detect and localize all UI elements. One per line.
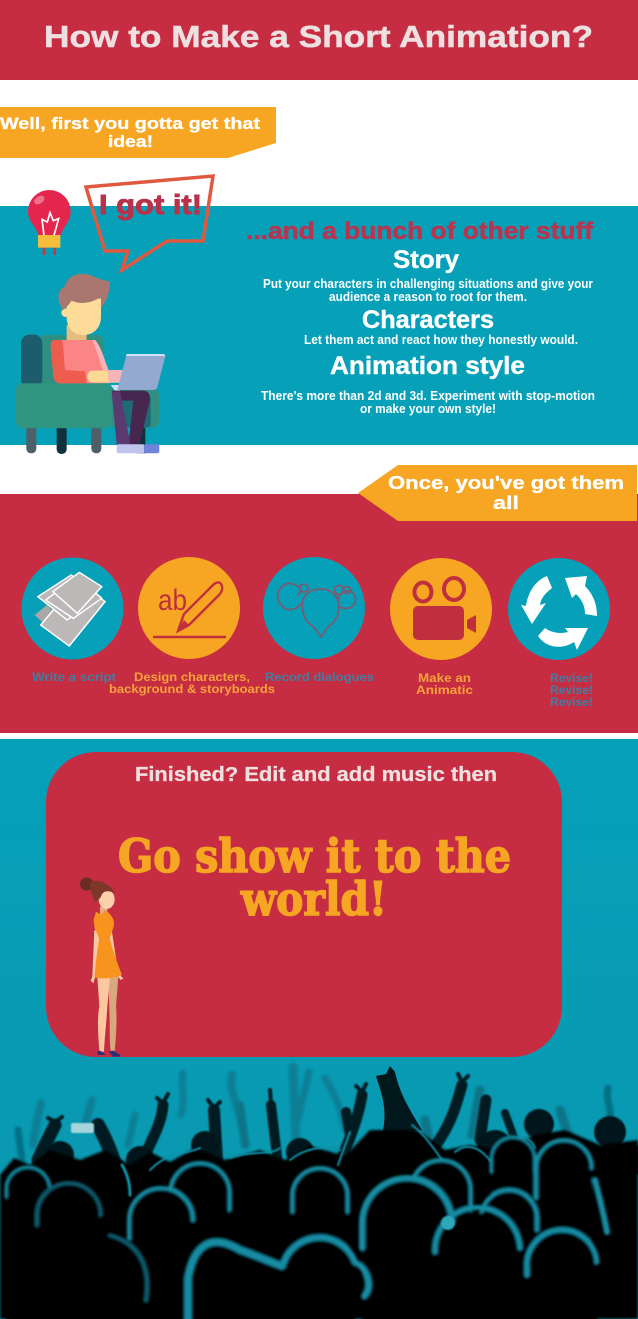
step labels: Animatic [416,683,473,697]
icon: light bulb [28,190,71,255]
text block: story [263,246,593,304]
text block: animation style: There's more than 2d and 3d. Experiment with stop-motion [261,389,595,403]
speech bubble: I got it! [86,176,213,270]
title banner [0,0,638,80]
central raised hand [376,1066,422,1135]
panel: red steps section [0,494,638,733]
text block: characters [304,306,578,347]
title: How to Make a Short Animation? [44,19,593,54]
text block: story: Story [393,246,459,274]
idea ribbon [0,107,276,158]
image: concert crowd silhouette [0,1066,638,1319]
illustration: person on armchair with laptop [16,274,165,454]
bright light spot [441,1216,455,1230]
icon: script pages [22,558,124,660]
back heads [46,1109,638,1176]
icon: dialogue bubbles [263,557,365,659]
text block: characters: Characters [362,306,494,334]
icon: film camera [390,558,492,660]
headline: go show it to the world [118,829,511,926]
faint rim lights [122,1125,535,1195]
step labels: Revise! [550,671,593,685]
step labels: background & storyboards [109,682,275,696]
panel: red rounded card [46,752,562,1057]
dark crowd mass [0,1130,638,1319]
distant raised arms [18,1067,610,1160]
headline: go show it to the world: Go show it to the [118,829,511,883]
speech bubble: I got it!: I got it! [99,189,202,220]
step labels: Record dialogues [265,670,374,684]
foreground heads with rim light [6,1137,607,1319]
step labels: Revise! [550,683,593,697]
icon: drawing ab and pencil [138,557,240,659]
dark raised arms [38,1074,515,1200]
panel: teal idea section [0,206,638,445]
icon: revise arrows [508,558,610,660]
step labels: Write a script [32,670,116,684]
ribbon: once you've got them all [358,465,637,521]
text block: story: Put your characters in challenging situations and give your [263,277,593,291]
panel: final teal section [0,739,638,1319]
text block: story: audience a reason to root for them. [329,290,527,304]
step labels: Make an [418,671,471,685]
text block: characters: Let them act and react how they honestly would. [304,333,578,347]
heading: and a bunch of other stuff: ...and a bunch of other stuff [246,218,594,245]
ribbon: once you've got them all: all [493,492,519,513]
idea ribbon: idea! [108,133,153,151]
text: finished: Finished? Edit and add music then [135,764,497,786]
step labels [32,670,593,709]
phone [71,1123,94,1133]
text block: animation style [261,352,595,416]
step labels: Revise! [550,695,593,709]
ribbon: once you've got them all: Once, you've got them [388,472,624,493]
text block: animation style: Animation style [330,352,525,380]
headline: go show it to the world: world! [240,872,387,926]
illustration: woman in orange dress [80,877,123,1057]
text block: animation style: or make your own style! [360,402,496,416]
step labels: Design characters, [134,670,250,684]
icon: drawing ab and pencil: ab [158,584,187,617]
idea ribbon: Well, first you gotta get that [0,115,261,133]
